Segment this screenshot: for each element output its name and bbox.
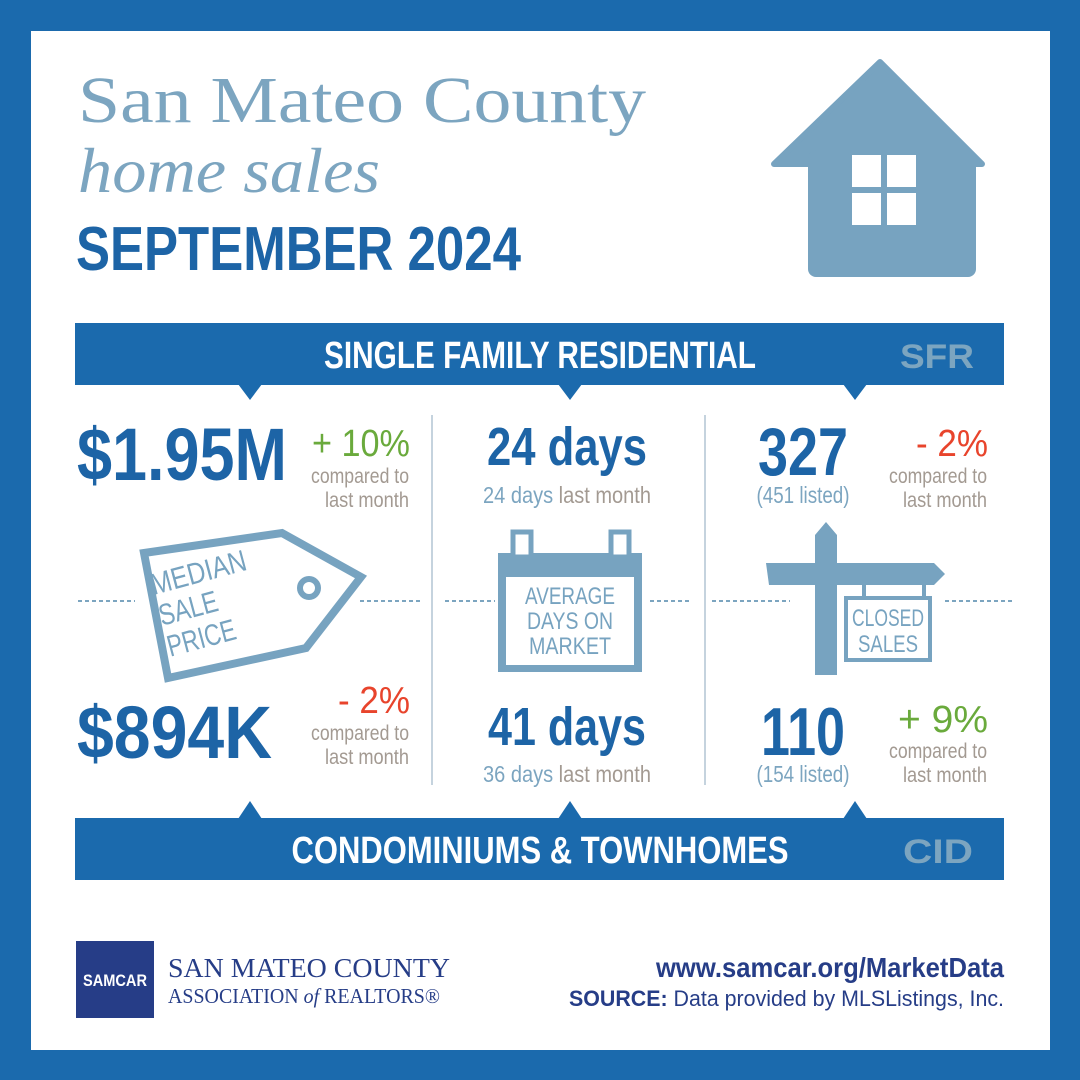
- stat: SFR closed sales: compared to: [889, 465, 987, 488]
- banner: single family residential: [75, 323, 1004, 400]
- stat: SFR days on market: [483, 417, 651, 508]
- stat: SFR median price: $1.95M: [77, 413, 287, 496]
- icon: sign post: [766, 522, 945, 675]
- stat: CID median price: - 2%: [338, 680, 410, 722]
- icon: price tag: MEDIAN: [147, 544, 250, 602]
- icon: house: [774, 62, 982, 277]
- stat: SFR closed sales: - 2%: [916, 423, 988, 465]
- icon: price tag: SALE: [155, 585, 222, 633]
- title: SEPTEMBER 2024: [76, 215, 521, 284]
- footer: source: www.samcar.org/MarketData: [655, 952, 1004, 983]
- stat: CID days on market: 41 days: [488, 697, 646, 757]
- stat: SFR median price: + 10%: [312, 423, 410, 465]
- stat: SFR median price: [77, 413, 410, 512]
- icon: price tag: PRICE: [163, 614, 240, 664]
- icon: sign post: SALES: [858, 631, 918, 658]
- icon: calendar: AVERAGE: [525, 583, 615, 610]
- logo: SAMCAR: SAN MATEO COUNTY: [168, 953, 450, 983]
- stat: CID closed sales: (154 listed): [756, 761, 850, 787]
- stat: SFR closed sales: 327: [758, 414, 848, 490]
- title: home sales: [78, 135, 380, 206]
- banner: single family residential: SINGLE FAMILY RESIDENTIAL: [324, 335, 756, 377]
- title: San Mateo County: [78, 64, 646, 137]
- banner: condominiums & townhomes: [75, 801, 1004, 880]
- stat: CID closed sales: compared to: [889, 740, 987, 763]
- stat: SFR days on market: 24 days: [487, 417, 647, 477]
- stat: CID median price: compared to: [311, 722, 409, 745]
- logo: SAMCAR: SAMCAR: [83, 971, 147, 990]
- banner: single family residential: SFR: [900, 338, 974, 376]
- stat: SFR closed sales: last month: [903, 489, 987, 512]
- stat: SFR median price: compared to: [311, 465, 409, 488]
- stat: CID closed sales: 110: [761, 694, 845, 770]
- icon: calendar: MARKET: [529, 633, 611, 660]
- icon: calendar: DAYS ON: [527, 608, 613, 635]
- footer: source: SOURCE: Data provided by MLSListings, Inc.: [569, 986, 1004, 1011]
- stat: SFR median price: last month: [325, 489, 409, 512]
- footer: source: [569, 952, 1004, 1011]
- stat: SFR days on market: 24 days last month: [483, 482, 651, 508]
- banner: condominiums & townhomes: CID: [903, 833, 973, 871]
- stat: CID median price: [77, 680, 410, 774]
- stat: SFR closed sales: (451 listed): [756, 482, 850, 508]
- stat: CID closed sales: [756, 694, 988, 787]
- stat: SFR closed sales: [756, 414, 988, 512]
- icon: calendar: [498, 532, 642, 672]
- stat: CID median price: last month: [325, 746, 409, 769]
- icon: sign post: CLOSED: [852, 605, 924, 632]
- stat: CID closed sales: last month: [903, 764, 987, 787]
- stat: CID days on market: 36 days last month: [483, 761, 651, 787]
- title: [76, 64, 646, 284]
- stat: CID median price: $894K: [77, 691, 272, 774]
- logo: SAMCAR: [76, 941, 450, 1018]
- stat: CID closed sales: + 9%: [898, 699, 988, 741]
- banner: condominiums & townhomes: CONDOMINIUMS & TOWNHOMES: [292, 830, 788, 872]
- icon: price tag: [144, 533, 361, 678]
- stat: CID days on market: [483, 697, 651, 787]
- logo: SAMCAR: ASSOCIATION of REALTORS®: [168, 984, 440, 1008]
